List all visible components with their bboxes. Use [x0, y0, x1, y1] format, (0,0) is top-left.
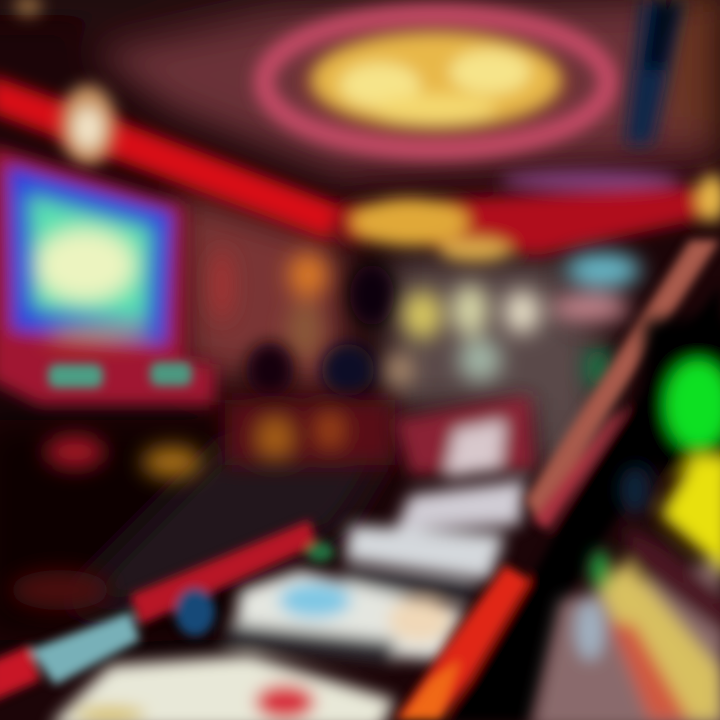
screen [0, 145, 215, 405]
machine row [10, 400, 395, 610]
right diagonal bars [395, 240, 720, 720]
red beam [0, 0, 720, 262]
dark ceiling column [625, 0, 684, 145]
rail [0, 520, 334, 702]
centre lights [386, 252, 641, 388]
wall glow [212, 249, 328, 360]
wall lamp [60, 85, 116, 165]
ceiling chandelier [264, 14, 608, 150]
right slot machines [530, 320, 720, 720]
tables [50, 395, 535, 720]
seated figures [246, 265, 394, 398]
